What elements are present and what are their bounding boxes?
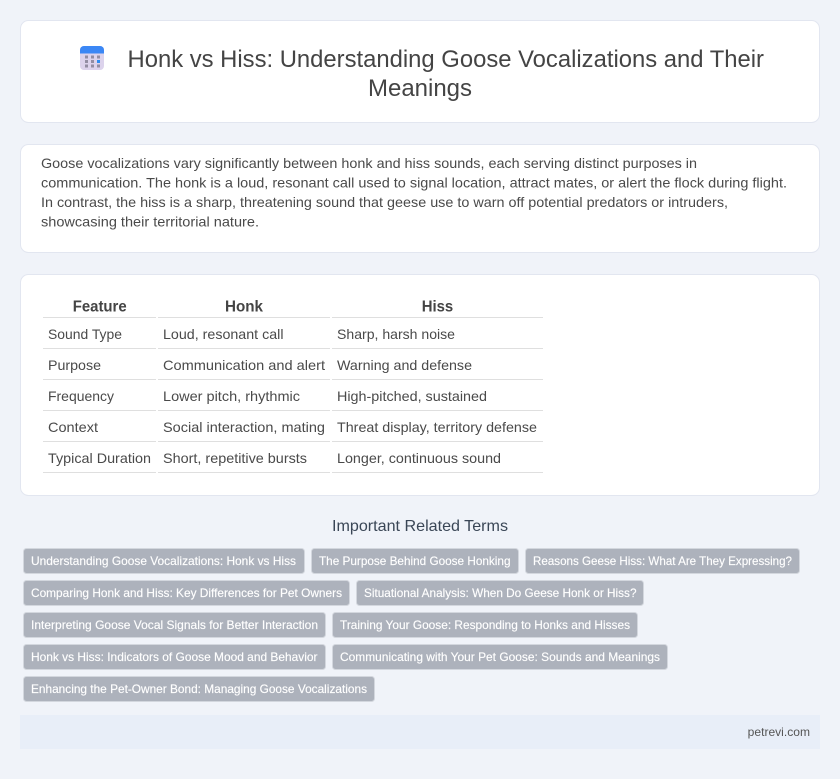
title text [128, 46, 764, 102]
tag: The Purpose Behind Goose Honking [319, 554, 510, 568]
table row: context: Threat display, territory defense [337, 419, 537, 435]
table row: frequency: Lower pitch, rhythmic [163, 388, 300, 404]
table row: context: Social interaction, mating [163, 419, 325, 435]
table header: Honk [225, 298, 263, 316]
table row: sound type: Sound Type [48, 326, 122, 342]
table row: sound type: Sharp, harsh noise [337, 326, 455, 342]
table row: purpose: Communication and alert [163, 357, 325, 373]
table header: Hiss [422, 298, 453, 316]
panel: comparison table [20, 274, 820, 496]
tag: Enhancing the Pet-Owner Bond: Managing Goose Vocalizations [31, 682, 367, 696]
table row: typical duration: Typical Duration [48, 450, 151, 466]
tag [526, 548, 800, 574]
tag: Training Your Goose: Responding to Honks and Hisses [340, 618, 630, 632]
title text: Meanings [368, 75, 472, 102]
tag: Comparing Honk and Hiss: Key Differences for Pet Owners [31, 586, 342, 600]
table row: sound type: Loud, resonant call [163, 326, 284, 342]
intro paragraph: communication. The honk is a loud, resonant call used to signal location, attract mates, or alert the flock during flight. [41, 174, 787, 190]
tag [356, 580, 644, 606]
heading: important related terms: Important Related Terms [332, 518, 508, 535]
table row: typical duration [48, 450, 501, 466]
tag [312, 548, 518, 574]
tag: Honk vs Hiss: Indicators of Goose Mood and Behavior [31, 650, 318, 664]
table row: purpose: Purpose [48, 357, 101, 373]
title text: Honk vs Hiss: Understanding Goose Vocalizations and Their [128, 46, 764, 73]
table row: context: Context [48, 419, 98, 435]
tag: Interpreting Goose Vocal Signals for Better Interaction [31, 618, 318, 632]
tag [332, 644, 668, 670]
tag: Reasons Geese Hiss: What Are They Expressing? [533, 554, 792, 568]
table row: context [48, 419, 537, 435]
tag [24, 580, 350, 606]
table header: Feature [73, 298, 127, 316]
icon: calendar [80, 46, 104, 70]
intro paragraph [41, 155, 787, 229]
footer site name: petrevi.com [748, 725, 810, 739]
footer bar [20, 715, 820, 749]
intro paragraph: Goose vocalizations vary significantly between honk and hiss sounds, each serving distinct purposes in [41, 155, 697, 171]
tag [24, 676, 374, 702]
table row: sound type [48, 326, 455, 342]
tag: Situational Analysis: When Do Geese Honk or Hiss? [364, 586, 637, 600]
intro paragraph: In contrast, the hiss is a sharp, threatening sound that geese use to warn off potential predators or intruders, [41, 194, 728, 210]
tag [24, 548, 304, 574]
related terms tags [24, 548, 800, 702]
tag [24, 612, 326, 638]
table row: typical duration: Short, repetitive bursts [163, 450, 307, 466]
table row: purpose [48, 357, 472, 373]
tag: Communicating with Your Pet Goose: Sounds and Meanings [340, 650, 660, 664]
panel: title header [20, 20, 820, 122]
table row: purpose: Warning and defense [337, 357, 472, 373]
panel: introduction [20, 144, 820, 252]
table row: frequency: Frequency [48, 388, 114, 404]
table header [73, 298, 453, 316]
table row: typical duration: Longer, continuous sound [337, 450, 501, 466]
intro paragraph: showcasing their territorial nature. [41, 213, 259, 229]
tag [332, 612, 638, 638]
table row: frequency: High-pitched, sustained [337, 388, 487, 404]
tag [24, 644, 326, 670]
tag: Understanding Goose Vocalizations: Honk vs Hiss [31, 554, 296, 568]
table row: frequency [48, 388, 487, 404]
